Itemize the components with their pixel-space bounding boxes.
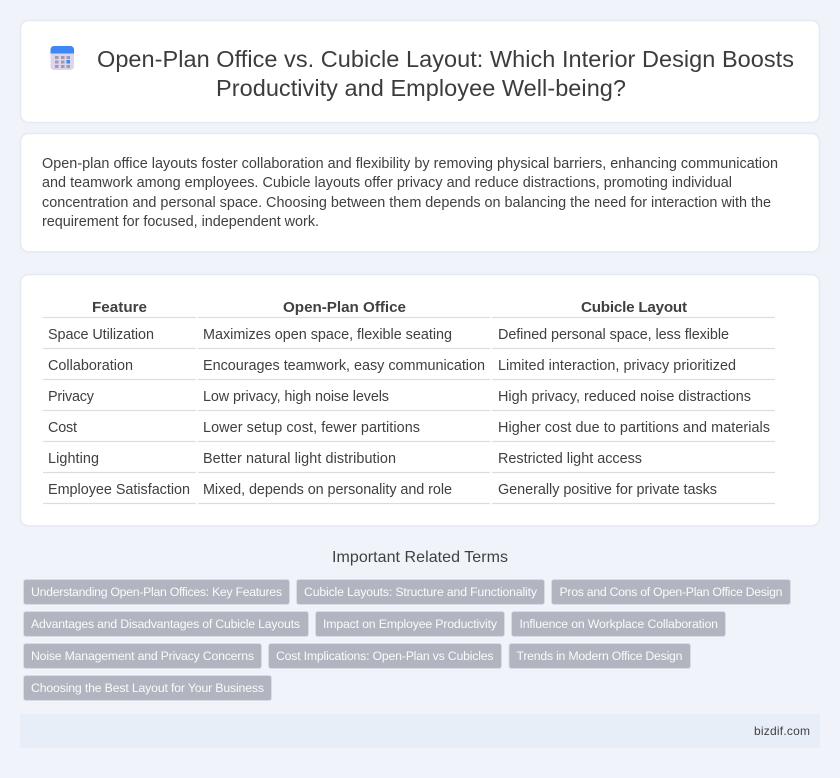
footer source text: bizdif.com	[754, 724, 810, 738]
table row: employee satisfaction: Generally positive for private tasks	[498, 482, 717, 498]
summary text: Open-plan office layouts foster collaboration and flexibility by removing physical barriers, enhancing communication	[42, 156, 778, 172]
table row: collaboration	[43, 358, 775, 380]
tag: pros and cons: Pros and Cons of Open-Plan Office Design	[560, 585, 783, 599]
table row: collaboration: Limited interaction, privacy prioritized	[498, 358, 736, 374]
icon: calendar	[50, 46, 74, 70]
table row: lighting: Lighting	[48, 451, 99, 467]
related terms heading: Important Related Terms	[332, 549, 508, 566]
tag: cost implications: Cost Implications: Open-Plan vs Cubicles	[276, 649, 494, 663]
table row: cost: Cost	[48, 420, 77, 436]
title: Productivity and Employee Well-being?	[216, 75, 626, 101]
tag: pros and cons	[552, 580, 790, 604]
tag: choosing the best layout: Choosing the Best Layout for Your Business	[31, 681, 264, 695]
table row: space utilization: Defined personal space, less flexible	[498, 327, 729, 343]
tag: cubicle layouts: Cubicle Layouts: Structure and Functionality	[304, 585, 538, 599]
table row: cost: Higher cost due to partitions and materials	[498, 420, 770, 436]
footer bar	[20, 714, 820, 748]
table row: employee satisfaction: Employee Satisfaction	[48, 482, 190, 498]
tag: cost implications	[268, 644, 502, 668]
tag: employee productivity	[316, 612, 504, 636]
tag: cubicle layouts	[296, 580, 544, 604]
table row: space utilization: Maximizes open space, flexible seating	[203, 327, 452, 343]
table header: Cubicle Layout	[581, 299, 687, 316]
table row: collaboration: Encourages teamwork, easy communication	[203, 358, 485, 374]
tag: employee productivity: Impact on Employee Productivity	[323, 617, 498, 631]
tag: choosing the best layout	[24, 676, 272, 700]
table row: lighting: Restricted light access	[498, 451, 642, 467]
table header: Open-Plan Office	[283, 299, 406, 316]
table row: cost: Lower setup cost, fewer partitions	[203, 420, 420, 436]
table row: space utilization	[43, 327, 775, 348]
table row: collaboration: Collaboration	[48, 358, 133, 374]
table row: employee satisfaction	[43, 482, 775, 504]
tag: modern office trends	[509, 644, 690, 668]
table row: lighting	[43, 451, 775, 472]
related terms tags	[24, 580, 790, 700]
tag: workplace collaboration	[512, 612, 726, 636]
tag: understanding open-plan offices	[24, 580, 290, 604]
summary text	[42, 156, 778, 230]
tag: advantages and disadvantages: Advantages and Disadvantages of Cubicle Layouts	[31, 617, 300, 631]
table header	[43, 299, 775, 318]
table row: cost	[43, 420, 775, 442]
panel: summary	[20, 134, 820, 252]
panel: title header	[20, 20, 820, 122]
table row: privacy: Low privacy, high noise levels	[203, 389, 389, 405]
summary text: and teamwork among employees. Cubicle layouts offer privacy and reduce distractions, promoting individual	[42, 175, 732, 191]
title	[97, 46, 794, 101]
table row: privacy: High privacy, reduced noise distractions	[498, 389, 751, 405]
tag: understanding open-plan offices: Understanding Open-Plan Offices: Key Features	[31, 585, 282, 599]
title: Open-Plan Office vs. Cubicle Layout: Which Interior Design Boosts	[97, 46, 794, 72]
tag: noise management	[24, 644, 262, 668]
table header: Feature	[92, 299, 147, 316]
panel: comparison table	[20, 274, 820, 526]
table row: privacy: Privacy	[48, 389, 95, 405]
table row: lighting: Better natural light distribution	[203, 451, 396, 467]
summary text: requirement for focused, independent work.	[42, 214, 319, 230]
table row: privacy	[43, 389, 775, 410]
tag: advantages and disadvantages	[24, 612, 308, 636]
tag: modern office trends: Trends in Modern Office Design	[516, 649, 683, 663]
table row: space utilization: Space Utilization	[48, 327, 154, 343]
tag: noise management: Noise Management and Privacy Concerns	[31, 649, 254, 663]
table row: employee satisfaction: Mixed, depends on personality and role	[203, 482, 452, 498]
tag: workplace collaboration: Influence on Workplace Collaboration	[520, 617, 718, 631]
summary text: concentration and personal space. Choosing between them depends on balancing the need for interaction with the	[42, 195, 771, 211]
